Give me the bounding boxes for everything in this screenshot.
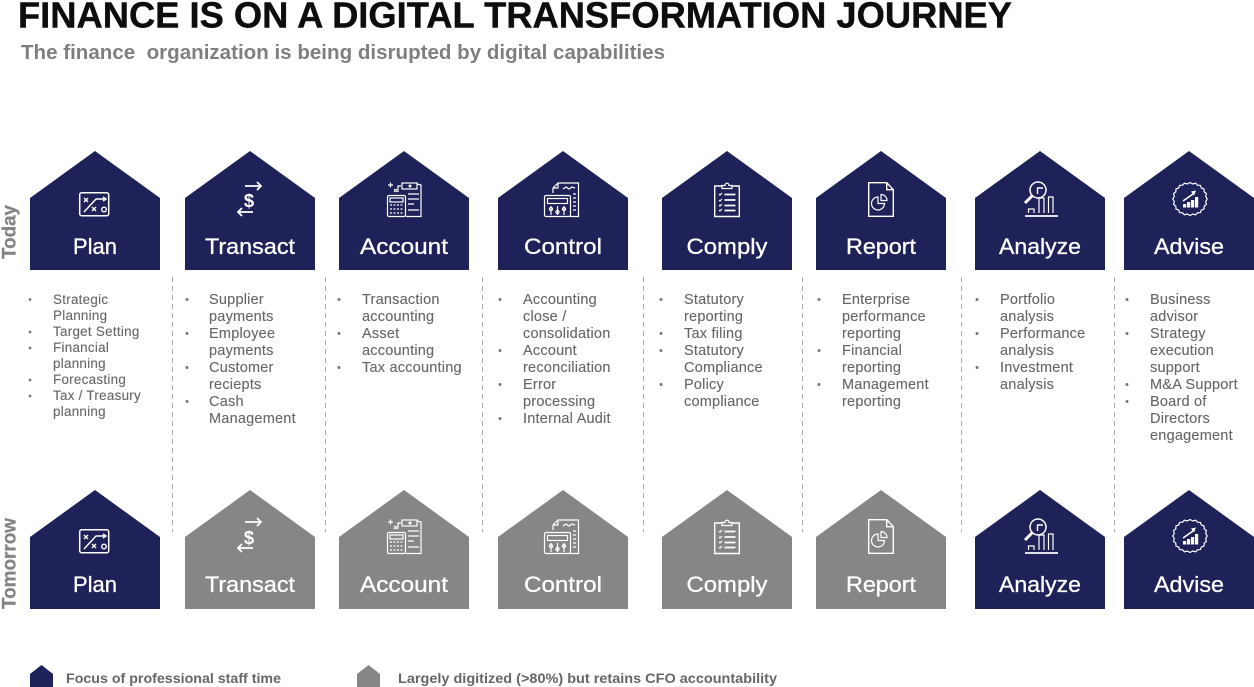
list: Control activities: Account (523, 343, 577, 359)
list: Advise activities: Directors (1150, 411, 1210, 427)
legend: professional staff time (30, 665, 282, 687)
row label: Tomorrow: Tomorrow (0, 518, 20, 609)
list: Comply activities (660, 292, 763, 410)
list: Plan activities: planning (53, 404, 106, 419)
list: Advise activities: Strategy (1150, 326, 1206, 342)
house: Transact today: Transact (205, 234, 295, 259)
list: Transact activities: payments (209, 309, 274, 325)
house: Account tomorrow: Account (360, 572, 448, 597)
list: Control activities: processing (523, 394, 595, 410)
legend: largely digitized: Largely digitized (>80%) but retains CFO accountability (398, 671, 778, 686)
list: Report activities: Enterprise (842, 292, 910, 308)
list: Control activities: reconciliation (523, 360, 611, 376)
list: Advise activities: M&A Support (1150, 377, 1238, 393)
house: Transact tomorrow (185, 490, 315, 609)
house: Analyze today: Analyze (999, 234, 1081, 259)
list: Transact activities: Employee (209, 326, 275, 342)
legend: largely digitized (357, 665, 778, 687)
list: Analyze activities: Performance (1000, 326, 1085, 342)
list: Transact activities: reciepts (209, 377, 262, 393)
house: Control tomorrow: Control (524, 572, 602, 597)
list: Account activities: Asset (362, 326, 399, 342)
house: Comply today (662, 151, 792, 270)
house: Transact today (185, 151, 315, 270)
tomorrow row (30, 490, 1254, 609)
list: Report activities: Management (842, 377, 929, 393)
list: Account activities: Transaction (362, 292, 440, 308)
list: Report activities: performance (842, 309, 926, 325)
house: Account today (339, 151, 469, 270)
house: Control today (498, 151, 628, 270)
list: Control activities: consolidation (523, 326, 611, 342)
list: Control activities: Internal Audit (523, 411, 611, 427)
house: Comply today: Comply (686, 234, 768, 259)
list: Account activities: Tax accounting (362, 360, 462, 376)
list: Transact activities: Cash (209, 394, 244, 410)
list: Plan activities: Target Setting (53, 324, 140, 339)
list: Plan activities: Tax / Treasury (53, 388, 141, 403)
today row (30, 151, 1254, 270)
house: Plan tomorrow: Plan (73, 572, 117, 597)
house: Comply tomorrow (662, 490, 792, 609)
list: Report activities (818, 292, 929, 410)
house: Advise today (1124, 151, 1254, 270)
list: Control activities: close / (523, 309, 567, 325)
subtitle: The finance organization is being disrupted by digital capabilities (21, 42, 665, 64)
house: Report tomorrow: Report (846, 572, 916, 597)
house: Analyze today (975, 151, 1105, 270)
list: Control activities: Accounting (523, 292, 597, 308)
list: Plan activities: Financial (53, 340, 109, 355)
house: Plan tomorrow (30, 490, 160, 609)
list: Control activities: Error (523, 377, 556, 393)
house: Control tomorrow (498, 490, 628, 609)
list: Account activities: accounting (362, 343, 434, 359)
list: Plan activities: Forecasting (53, 372, 126, 387)
list: Advise activities: support (1150, 360, 1200, 376)
house: Comply tomorrow: Comply (686, 572, 768, 597)
house: Plan today: Plan (73, 234, 117, 259)
list: Report activities: reporting (842, 326, 901, 342)
list: Advise activities: advisor (1150, 309, 1198, 325)
list: Analyze activities (976, 292, 1085, 393)
list: Comply activities: Compliance (684, 360, 763, 376)
list: Advise activities: execution (1150, 343, 1214, 359)
house: Account tomorrow (339, 490, 469, 609)
house: Report tomorrow (816, 490, 946, 609)
list: Analyze activities: Investment (1000, 360, 1073, 376)
list: Transact activities: payments (209, 343, 274, 359)
house: Plan today (30, 151, 160, 270)
list: Advise activities (1126, 292, 1238, 444)
list: Plan activities: Strategic (53, 292, 108, 307)
row label: Today: Today (0, 205, 20, 259)
house: Transact tomorrow: Transact (205, 572, 295, 597)
house: Report today (816, 151, 946, 270)
house: Transact tomorrow: $ (244, 527, 255, 548)
house: Transact today: $ (244, 190, 255, 211)
list: Comply activities: Statutory (684, 292, 745, 308)
list: Transact activities: Management (209, 411, 296, 427)
list: Transact activities: Supplier (209, 292, 264, 308)
list: Report activities: reporting (842, 360, 901, 376)
list: Analyze activities: analysis (1000, 309, 1054, 325)
list: Plan activities (29, 292, 141, 419)
house: Advise tomorrow (1124, 490, 1254, 609)
list: Account activities: accounting (362, 309, 434, 325)
house: Analyze tomorrow: Analyze (999, 572, 1081, 597)
list: Comply activities: Statutory (684, 343, 745, 359)
list: Advise activities: engagement (1150, 428, 1233, 444)
house: Advise today: Advise (1154, 234, 1224, 259)
list: Plan activities: planning (53, 356, 106, 371)
list: Comply activities: Policy (684, 377, 725, 393)
list: Report activities: reporting (842, 394, 901, 410)
list: Comply activities: Tax filing (684, 326, 743, 342)
list: Advise activities: Business (1150, 292, 1211, 308)
house: Account today: Account (360, 234, 448, 259)
list: Control activities (498, 292, 611, 427)
list: Plan activities: Planning (53, 308, 107, 323)
list: Report activities: Financial (842, 343, 902, 359)
list: Transact activities: Customer (209, 360, 274, 376)
house: Analyze tomorrow (975, 490, 1105, 609)
list: Comply activities: compliance (684, 394, 760, 410)
house: Advise tomorrow: Advise (1154, 572, 1224, 597)
list: Analyze activities: analysis (1000, 377, 1054, 393)
list: Analyze activities: Portfolio (1000, 292, 1055, 308)
list: Analyze activities: analysis (1000, 343, 1054, 359)
list: Comply activities: reporting (684, 309, 743, 325)
list: Advise activities: Board of (1150, 394, 1207, 410)
list: Account activities (338, 292, 462, 376)
house: Report today: Report (846, 234, 916, 259)
legend: professional staff time: Focus of professional staff time (66, 671, 282, 686)
list: Transact activities (186, 292, 296, 427)
house: Control today: Control (524, 234, 602, 259)
